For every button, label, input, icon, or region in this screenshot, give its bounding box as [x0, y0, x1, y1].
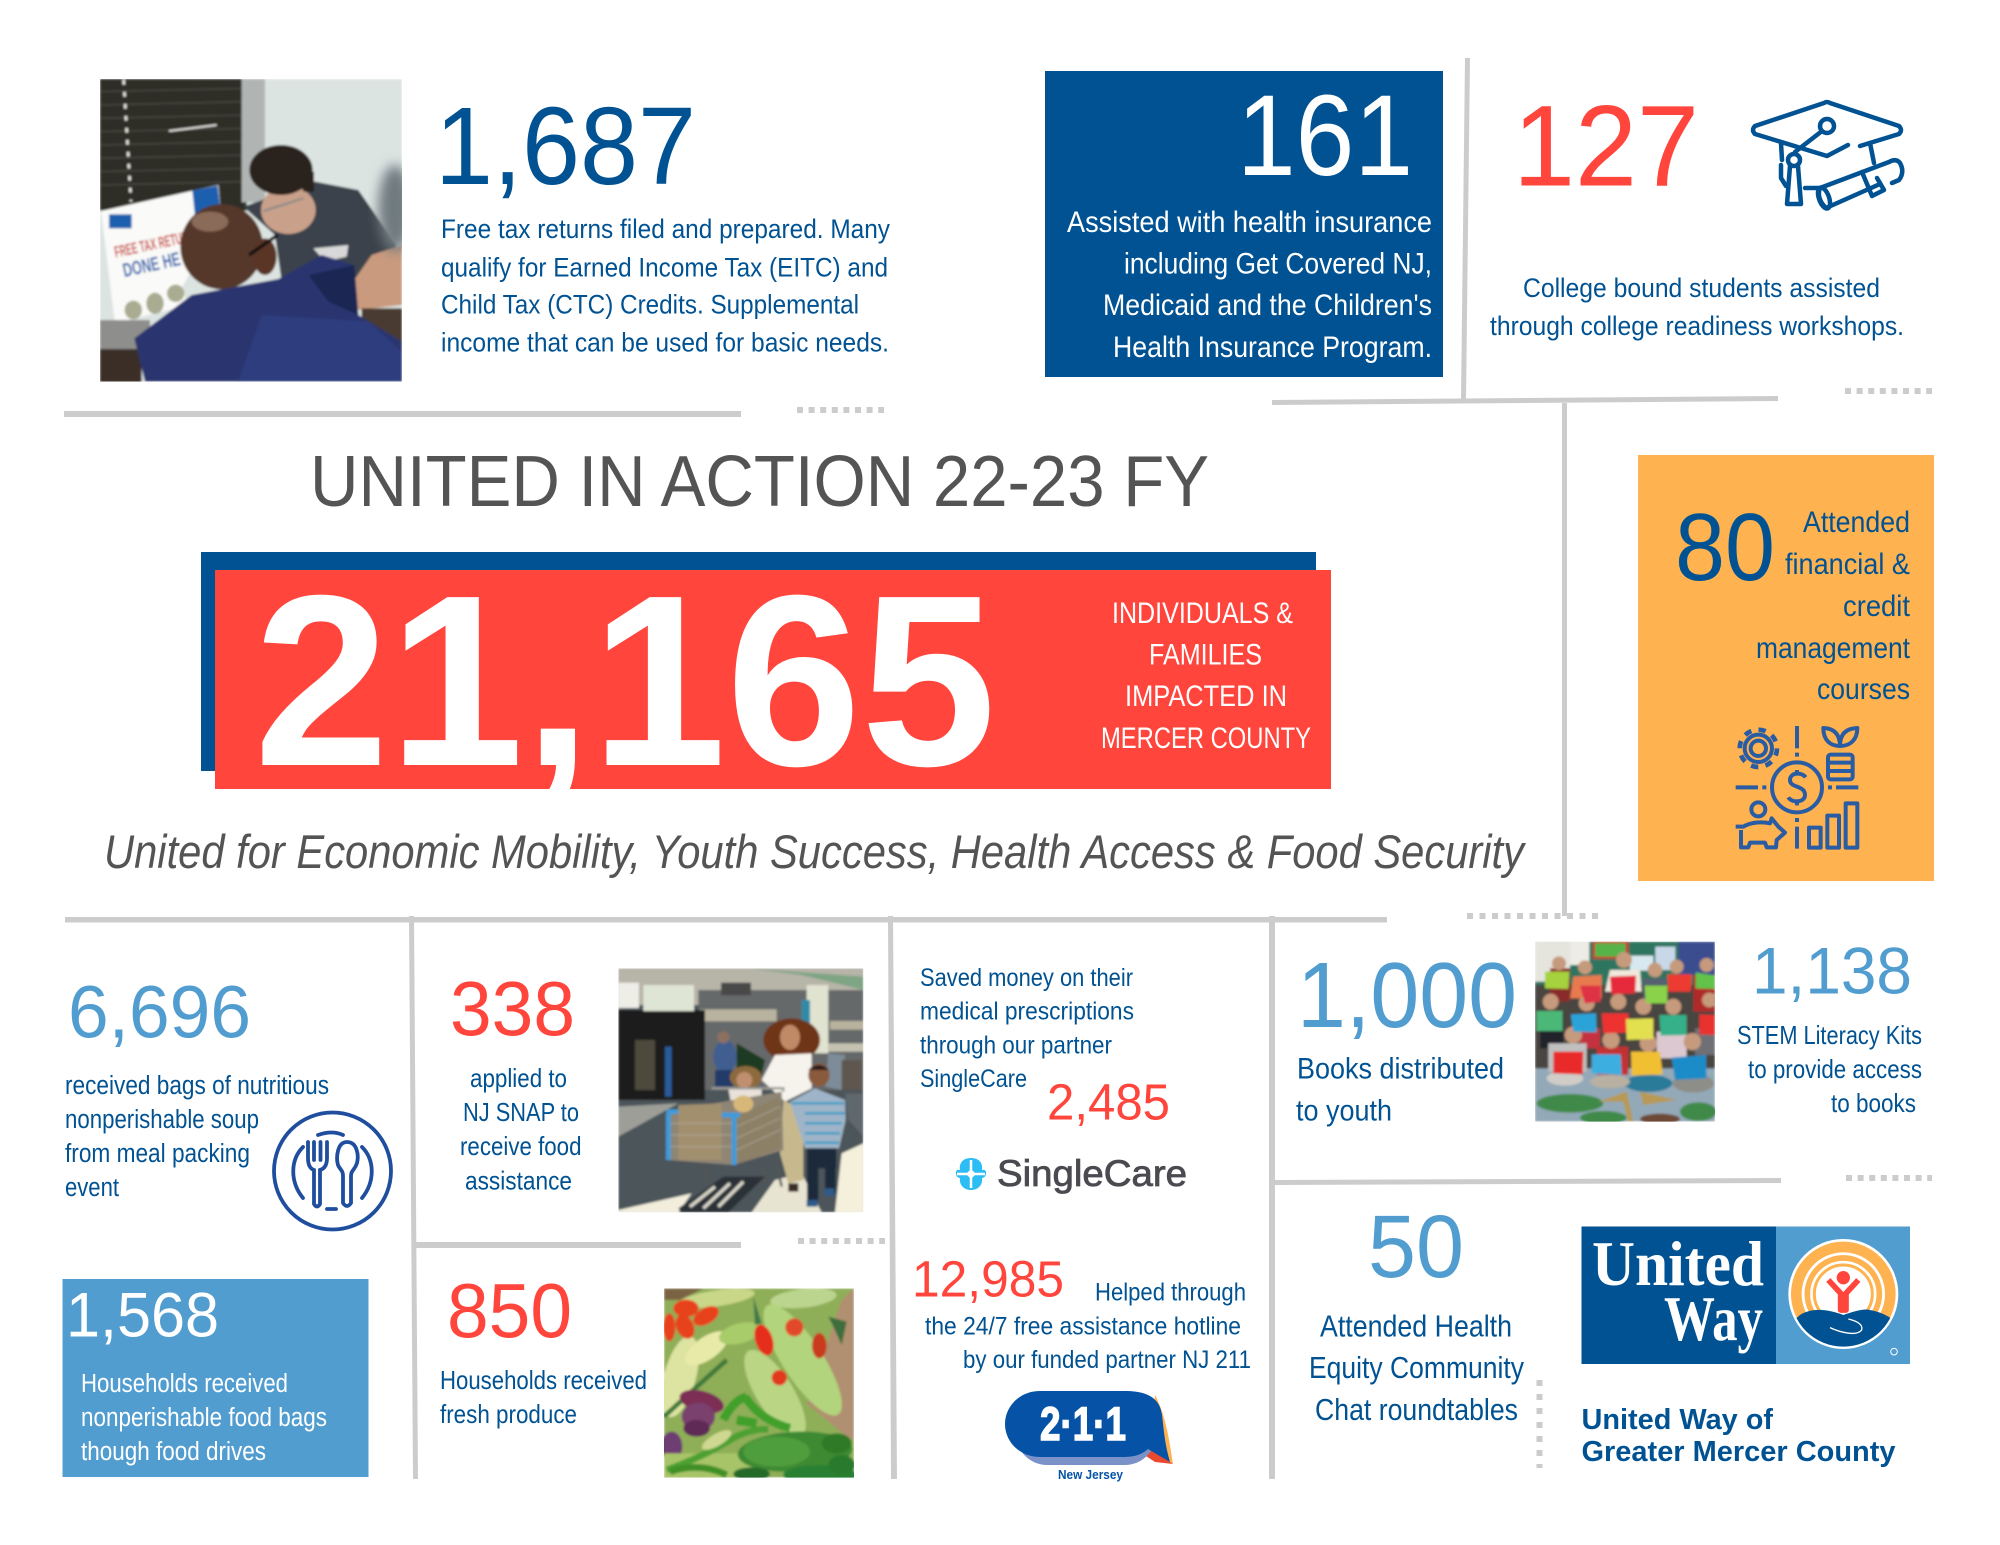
stat: 1,687 free tax returns: 1,687: [435, 85, 696, 208]
title: UNITED IN ACTION 22-23 FY: [310, 442, 1209, 522]
text: tax returns description: [441, 214, 891, 358]
stat: 2,485: 2,485: [1047, 1074, 1170, 1130]
logo: United Way: United: [1592, 1229, 1764, 1299]
text: STEM description: STEM Literacy Kits: [1737, 1020, 1922, 1050]
text: college description: College bound students assisted: [1523, 273, 1880, 303]
big number: 21,165: [254, 544, 996, 817]
logo: United Way: [1582, 1226, 1910, 1468]
stat: 850 fresh produce: [440, 1268, 647, 1429]
icon: graduation cap and diploma: [1753, 102, 1902, 210]
panel: 161 health insurance: [1045, 71, 1443, 377]
text: health equity description: [1309, 1310, 1525, 1427]
text: soup description: received bags of nutritious: [65, 1072, 329, 1100]
logo: SingleCare: SingleCare: [997, 1153, 1187, 1194]
photo: class of children holding books: [1535, 942, 1717, 1124]
panel: 1,568 households food bags: [62, 1279, 368, 1477]
text: SingleCare savings description: medical prescriptions: [920, 998, 1134, 1026]
text: SNAP description: [460, 1063, 582, 1196]
text: books description: [1296, 1052, 1504, 1128]
panel: 21,165 hero banner: [201, 552, 1331, 789]
stat: 1,000 books: [1296, 943, 1517, 1128]
text: hotline description: Helped through: [1095, 1278, 1246, 1306]
text: food bags description: nonperishable food bags: [81, 1404, 327, 1432]
logo: NJ 211: [1005, 1391, 1173, 1482]
text: health insurance description: Assisted with health insurance: [1067, 206, 1432, 239]
text: SNAP description: NJ SNAP to: [463, 1097, 579, 1127]
stat: 127 college bound students: [1490, 82, 1904, 341]
text: SNAP description: assistance: [465, 1166, 572, 1196]
text: organization name: United Way of: [1582, 1404, 1773, 1436]
text: financial courses description: [1756, 506, 1911, 706]
text: soup description: from meal packing: [65, 1140, 250, 1168]
text: tax returns description: Child Tax (CTC) Credits. Supplemental: [441, 290, 859, 320]
text: individuals and families: INDIVIDUALS &: [1112, 597, 1293, 630]
panel: 161 health insurance: 161: [1237, 72, 1413, 200]
text: SNAP description: receive food: [460, 1131, 582, 1161]
text: food bags description: though food drives: [81, 1438, 266, 1466]
text: health equity description: Equity Community: [1309, 1351, 1525, 1385]
text: food bags description: [81, 1370, 327, 1466]
text: tax returns description: Free tax returns filed and prepared. Many: [441, 214, 891, 244]
text: college description: [1490, 273, 1904, 341]
text: financial courses description: management: [1756, 632, 1911, 665]
text: SNAP description: applied to: [470, 1063, 567, 1093]
icon: plate fork and spoon: [274, 1112, 391, 1230]
text: health insurance description: [1067, 206, 1432, 364]
text: organization name: Greater Mercer County: [1582, 1436, 1896, 1468]
text: financial courses description: financial &: [1785, 548, 1910, 581]
text: individuals and families: IMPACTED IN: [1125, 680, 1287, 713]
text: soup description: event: [65, 1174, 119, 1202]
text: tax returns description: income that can be used for basic needs.: [441, 328, 889, 358]
text: hotline description: [925, 1278, 1251, 1374]
stat: 338 applied to NJ SNAP: [450, 966, 582, 1196]
text: organization name: [1582, 1404, 1896, 1468]
icon: finance symbols: [1736, 726, 1858, 849]
stat: 127 college bound students: 127: [1513, 82, 1699, 210]
text: individuals and families: [1101, 597, 1311, 755]
stat: 850 fresh produce: 850: [447, 1268, 572, 1354]
text: soup description: [65, 1072, 329, 1202]
photo: family with shopping cart: [618, 968, 863, 1212]
stat: 50 health equity: 50: [1368, 1196, 1464, 1296]
text: health insurance description: Health Insurance Program.: [1113, 331, 1432, 364]
text: individuals and families: FAMILIES: [1149, 638, 1262, 672]
text: financial courses description: Attended: [1803, 506, 1910, 539]
text: health insurance description: including Get Covered NJ,: [1124, 248, 1432, 280]
stat: 1,000 books: 1,000: [1297, 943, 1517, 1047]
stat: 12,985 hotline: [912, 1250, 1251, 1374]
photo: tax volunteer helping client: DONE HE: [121, 249, 183, 282]
stat: 1,687 free tax returns: [435, 85, 891, 358]
text: individuals and families: MERCER COUNTY: [1101, 722, 1311, 755]
text: financial courses description: credit: [1843, 590, 1911, 623]
stat: 12,985 hotline: 12,985: [912, 1250, 1064, 1308]
stat: 1,138 STEM kits: 1,138: [1752, 934, 1912, 1008]
stat: 6,696 bags of soup: 6,696: [68, 970, 251, 1054]
subtitle: United for Economic Mobility, Youth Success, Health Access & Food Security: [104, 825, 1526, 878]
text: produce description: [440, 1365, 647, 1429]
text: soup description: nonperishable soup: [65, 1106, 259, 1134]
text: SingleCare savings description: SingleCare: [920, 1065, 1027, 1093]
text: books description: Books distributed: [1297, 1052, 1504, 1086]
logo: NJ 211: 2·1·1: [1040, 1397, 1126, 1450]
text: financial courses description: courses: [1817, 673, 1910, 706]
text: health insurance description: Medicaid and the Children's: [1103, 289, 1432, 322]
text: health equity description: Attended Health: [1320, 1310, 1512, 1344]
text: STEM description: to provide access: [1748, 1054, 1922, 1084]
logo: United Way: Way: [1664, 1284, 1763, 1354]
icon: rainbow hand and person: [1787, 1238, 1900, 1355]
text: college description: through college readiness workshops.: [1490, 311, 1904, 341]
panel: 80 financial courses: [1638, 455, 1934, 881]
stat: 6,696 bags of soup: [65, 970, 329, 1202]
stat: 338 applied to NJ SNAP: 338: [450, 966, 575, 1052]
stat: 1,138 STEM kits: [1737, 934, 1922, 1118]
text: hotline description: the 24/7 free assistance hotline: [925, 1312, 1241, 1340]
text: health equity description: Chat roundtables: [1315, 1393, 1518, 1427]
logo: NJ 211: New Jersey: [1058, 1467, 1124, 1482]
text: tax returns description: qualify for Earned Income Tax (EITC) and: [441, 252, 888, 282]
photo: tax volunteer helping client: [100, 79, 412, 382]
panel: 1,568 households food bags: 1,568: [66, 1280, 219, 1350]
text: food bags description: Households received: [81, 1370, 288, 1398]
text: hotline description: by our funded partner NJ 211: [963, 1346, 1251, 1374]
text: produce description: fresh produce: [440, 1399, 577, 1429]
text: STEM description: to books: [1831, 1088, 1916, 1118]
text: SingleCare savings description: through our partner: [920, 1032, 1112, 1060]
panel: 80 financial courses: 80: [1675, 494, 1775, 601]
text: SingleCare savings description: Saved money on their: [920, 964, 1133, 992]
text: produce description: Households received: [440, 1365, 647, 1395]
text: STEM description: [1737, 1020, 1922, 1118]
text: SingleCare savings description: [920, 964, 1134, 1093]
text: books description: to youth: [1296, 1094, 1392, 1128]
stat: 50 health equity: [1309, 1196, 1525, 1427]
photo: tax volunteer helping client: FREE TAX RETUR: [113, 229, 190, 262]
photo: box of fresh vegetables: [664, 1288, 854, 1478]
